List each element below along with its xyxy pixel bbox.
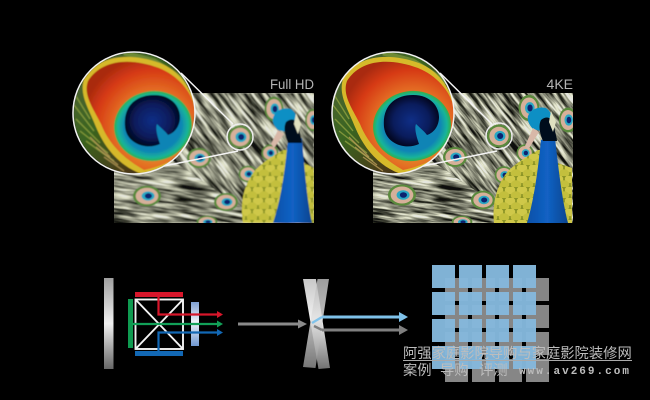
polarizer filter — [191, 302, 199, 346]
watermark underline — [403, 360, 632, 361]
gray arrow to shifter — [238, 320, 307, 328]
watermark line 1: 阿强家庭影院导购与家庭影院装修网 — [403, 345, 632, 362]
gray beam — [314, 325, 408, 335]
callout lines: Full HD — [164, 73, 238, 166]
optical diagram: light engine — [104, 278, 223, 369]
blue shifted beam — [312, 312, 408, 323]
head — [273, 108, 296, 132]
prism square — [136, 300, 183, 349]
icon: small loupe ring — [227, 124, 253, 150]
peacock photo: Full HD — [114, 93, 314, 223]
neck — [527, 138, 568, 223]
red arrow — [158, 297, 223, 318]
watermark line 2b: 导购 — [440, 362, 469, 379]
neck — [273, 138, 312, 223]
callout lines: 4KE — [423, 73, 497, 166]
watermark line 2: 案例 — [403, 361, 432, 379]
watermark url: www.av269.com — [519, 366, 629, 378]
green panel — [128, 299, 133, 348]
label: 4KE: 4KE — [547, 76, 573, 92]
output arrows — [312, 312, 408, 335]
head — [528, 107, 551, 131]
label: Full HD: Full HD — [270, 76, 314, 92]
blue arrow — [158, 329, 223, 351]
magnified eye: 4KE — [332, 52, 455, 174]
watermark line 2c: 评测 — [479, 362, 508, 379]
lamp bar — [104, 278, 114, 369]
blue panel — [135, 351, 183, 356]
icon: small loupe ring — [486, 123, 512, 149]
watermark — [403, 345, 632, 379]
X-shaped pixel shifter — [303, 279, 330, 369]
red panel — [135, 292, 183, 297]
pixel grid: gray layer — [445, 278, 549, 382]
peacock photo: 4KE — [373, 93, 573, 223]
panel: 4KE comparison — [305, 0, 641, 326]
panel: Full HD comparison — [46, 0, 382, 326]
green arrow — [132, 320, 223, 328]
body scales — [242, 150, 314, 223]
magnified eye: Full HD — [73, 52, 196, 174]
pixel grid: blue layer — [432, 265, 536, 369]
body scales — [493, 150, 572, 223]
